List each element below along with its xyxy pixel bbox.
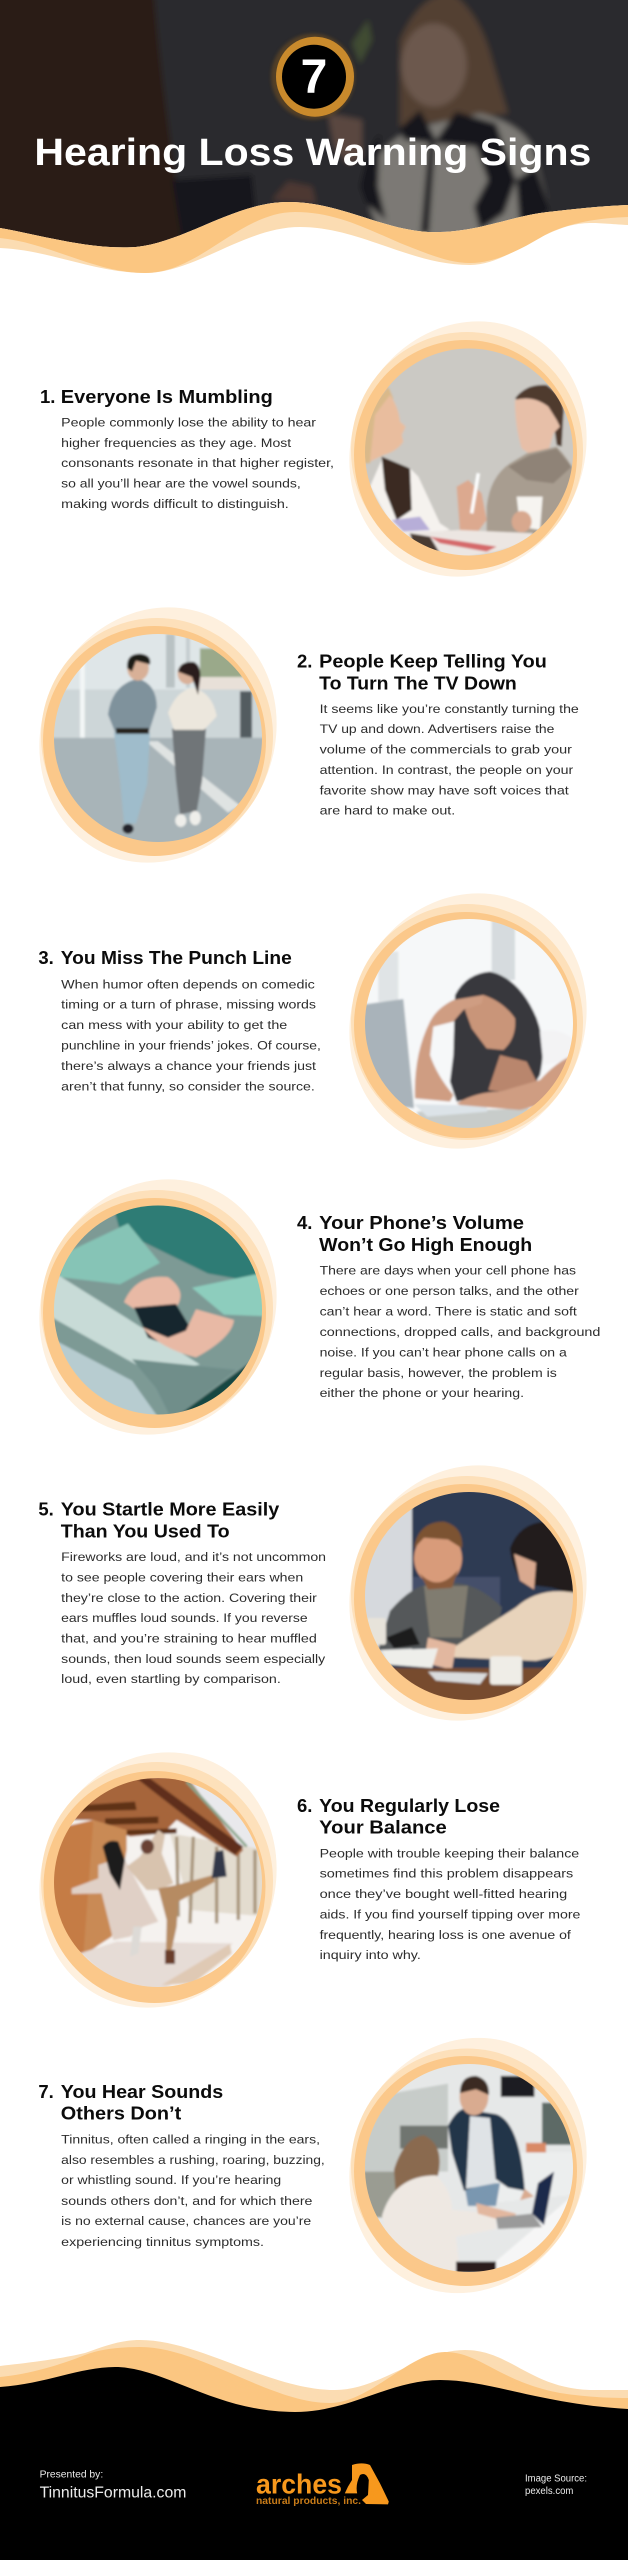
logo: arches natural products xyxy=(256,2463,389,2507)
item 6 text: aids. If you find yourself tipping over more xyxy=(320,1908,581,1922)
image source: Image Source: xyxy=(525,2473,587,2484)
item 7 text: sounds others don’t, and for which there xyxy=(61,2194,313,2208)
item 2 text: volume of the commercials to grab your xyxy=(320,743,572,757)
item 2 text: favorite show may have soft voices that xyxy=(320,783,570,797)
item 7 text: Others Don’t xyxy=(61,2102,181,2124)
item 6 text: sometimes find this problem disappears xyxy=(320,1867,573,1881)
item 5 text: ears muffles loud sounds. If you reverse xyxy=(61,1611,308,1625)
item 4 text: connections, dropped calls, and background xyxy=(320,1325,600,1339)
title: Hearing Loss Warning Signs xyxy=(34,132,591,174)
item 2 text: 2. xyxy=(297,650,312,672)
logo: arches natural products: arches xyxy=(256,2468,342,2499)
badge: number 7 xyxy=(271,34,355,120)
item 1 text xyxy=(40,386,334,511)
item 4 text xyxy=(297,1212,600,1400)
item 5 text: Than You Used To xyxy=(61,1520,230,1542)
item 7 text: Tinnitus, often called a ringing in the ears, xyxy=(61,2133,320,2147)
item 1 photo: two women talking xyxy=(350,322,586,576)
item 5 text: to see people covering their ears when xyxy=(61,1570,303,1584)
item 5 text: Fireworks are loud, and it’s not uncommon xyxy=(61,1550,326,1564)
item 5 text xyxy=(38,1498,326,1686)
item 6 text xyxy=(297,1795,581,1962)
item 1 text: 1. xyxy=(40,386,55,407)
item 1 text: higher frequencies as they age. Most xyxy=(61,436,292,450)
item 4 text: Won’t Go High Enough xyxy=(319,1234,532,1255)
item 4 text: There are days when your cell phone has xyxy=(320,1264,576,1278)
item 7 text xyxy=(38,2081,325,2249)
item 1 text: People commonly lose the ability to hear xyxy=(61,415,316,429)
item 5 text: that, and you’re straining to hear muffled xyxy=(61,1632,317,1646)
item 5 text: You Startle More Easily xyxy=(61,1498,280,1519)
item 7 text: is no external cause, chances are you’re xyxy=(61,2214,311,2228)
header wave xyxy=(0,202,628,273)
footer wave and black background xyxy=(0,2340,628,2560)
item 5 text: they’re close to the action. Covering their xyxy=(61,1591,317,1605)
item 4 text: Your Phone’s Volume xyxy=(319,1212,524,1233)
item 6 text: inquiry into why. xyxy=(320,1948,421,1962)
item 3 text: When humor often depends on comedic xyxy=(61,977,315,991)
item 3 text: can mess with your ability to get the xyxy=(61,1018,287,1032)
item 3 text: punchline in your friends’ jokes. Of course, xyxy=(61,1038,321,1052)
item 2 text: To Turn The TV Down xyxy=(319,673,517,694)
item 4 text: either the phone or your hearing. xyxy=(320,1386,524,1400)
item 3 text: 3. xyxy=(38,947,54,968)
item 6 text: 6. xyxy=(297,1795,312,1816)
item 4 photo: hands holding phone xyxy=(40,1180,276,1434)
item 7 text: 7. xyxy=(38,2081,54,2102)
item 1 text: making words difficult to distinguish. xyxy=(61,497,289,511)
item 6 text: Your Balance xyxy=(319,1816,447,1837)
item 6 text: People with trouble keeping their balance xyxy=(320,1846,579,1860)
item 4 text: can’t hear a word. There is static and soft xyxy=(320,1304,577,1318)
item 2 text: People Keep Telling You xyxy=(319,650,547,672)
image source: pexels.com xyxy=(525,2486,573,2497)
item 5 text: 5. xyxy=(38,1498,54,1519)
item 4 text: regular basis, however, the problem is xyxy=(320,1366,557,1380)
item 7 text: You Hear Sounds xyxy=(61,2081,223,2102)
item 4 text: echoes or one person talks, and the other xyxy=(320,1284,579,1298)
item 7 text: also resembles a rushing, roaring, buzzing, xyxy=(61,2153,325,2167)
item 4 text: 4. xyxy=(297,1212,312,1233)
item 7 text: experiencing tinnitus symptoms. xyxy=(61,2235,264,2249)
item 3 text: You Miss The Punch Line xyxy=(61,947,292,968)
image source xyxy=(525,2473,587,2497)
item 4 text: noise. If you can’t hear phone calls on a xyxy=(320,1345,567,1359)
item 3 photo: woman at laptop xyxy=(350,894,586,1148)
item 5 text: sounds, then loud sounds seem especially xyxy=(61,1652,326,1666)
presented by xyxy=(40,2469,186,2502)
item 2 text: are hard to make out. xyxy=(320,804,455,818)
item 7 text: or whistling sound. If you’re hearing xyxy=(61,2173,281,2187)
item 1 text: Everyone Is Mumbling xyxy=(61,386,273,407)
item 6 text: You Regularly Lose xyxy=(319,1795,500,1816)
presented by: Presented by: xyxy=(40,2469,103,2480)
badge: number 7: 7 xyxy=(301,51,327,104)
item 2 photo: couple walking xyxy=(40,608,276,862)
item 2 text: It seems like you’re constantly turning the xyxy=(320,702,579,716)
item 2 text xyxy=(297,650,579,818)
item 6 text: once they’ve bought well-fitted hearing xyxy=(320,1887,567,1901)
item 5 photo: couple reading paperwork xyxy=(350,1466,586,1720)
item 3 text: there’s always a chance your friends just xyxy=(61,1059,317,1073)
logo: arches natural products: natural products, inc. xyxy=(256,2496,361,2507)
item 6 photo: friends kicking by snowy cabin xyxy=(40,1752,276,2008)
item 1 text: consonants resonate in that higher register, xyxy=(61,456,334,470)
item 3 text xyxy=(38,947,321,1093)
item 6 text: frequently, hearing loss is one avenue of xyxy=(320,1928,572,1942)
item 7 photo: colleagues at laptop xyxy=(350,2038,586,2293)
item 5 text: loud, even startling by comparison. xyxy=(61,1672,281,1686)
item 3 text: timing or a turn of phrase, missing words xyxy=(61,998,316,1012)
item 3 text: aren’t that funny, so consider the source. xyxy=(61,1079,315,1093)
header banner photo xyxy=(0,0,628,248)
item 2 text: attention. In contrast, the people on your xyxy=(320,763,573,777)
presented by: TinnitusFormula.com xyxy=(40,2485,186,2502)
item 1 text: so all you’ll hear are the vowel sounds, xyxy=(61,476,301,490)
item 2 text: TV up and down. Advertisers raise the xyxy=(320,722,555,736)
